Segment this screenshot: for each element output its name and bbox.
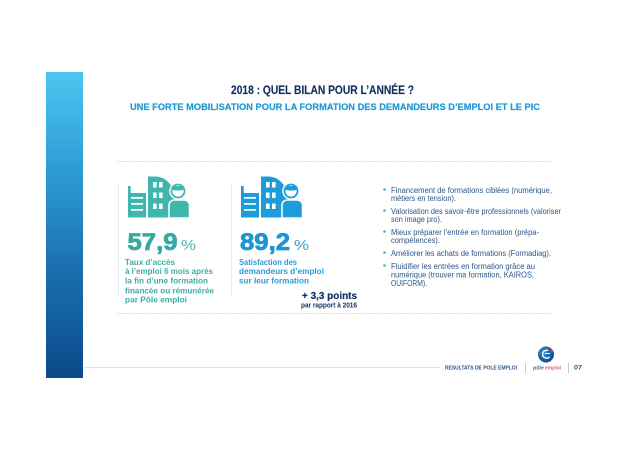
- label taux d'accès: par Pôle emploi: [125, 296, 187, 304]
- value 57,9 %: [128, 229, 196, 256]
- label satisfaction: demandeurs d’emploi: [239, 267, 324, 276]
- page number: 07: [574, 364, 582, 372]
- bullet list: Financement de formations ciblées (numérique,: [391, 186, 552, 195]
- logo: pôle emploi: [533, 346, 561, 372]
- value 89,2 %: 89,2: [240, 229, 290, 256]
- value 57,9 %: %: [181, 237, 196, 254]
- label satisfaction: sur leur formation: [239, 276, 309, 286]
- side gradient bar: [46, 72, 83, 378]
- value 57,9 %: 57,9: [128, 229, 178, 256]
- label satisfaction: [239, 258, 324, 286]
- bullet list: compétences).: [391, 236, 440, 245]
- logo: pôle emploi: pôle: [533, 366, 544, 372]
- icon: building and person teal: [128, 176, 190, 218]
- bullet list: [383, 186, 561, 288]
- value 89,2 %: %: [294, 237, 309, 254]
- bullet list: numérique (trouver ma formation, KAIROS,: [391, 270, 534, 280]
- label taux d'accès: la fin d’une formation: [125, 276, 208, 286]
- value 89,2 %: [240, 229, 309, 256]
- bullet list: son image pro).: [391, 215, 442, 224]
- footer: [445, 346, 582, 373]
- label satisfaction: Satisfaction des: [239, 258, 298, 267]
- label taux d'accès: [125, 258, 215, 304]
- bullet list: Fluidifier les entrées en formation grâce au: [391, 262, 535, 271]
- bullet list: Valorisation des savoir-être professionnels (valoriser: [391, 207, 561, 216]
- bullet list: Mieux préparer l’entrée en formation (prépa-: [391, 228, 539, 237]
- panel: satisfaction: [239, 176, 357, 310]
- callout: plus 3,3 points: + 3,3 points: [302, 290, 357, 302]
- label taux d'accès: financée ou rémunérée: [125, 286, 215, 296]
- title: 2018 : QUEL BILAN POUR L’ANNÉE ?: [231, 84, 414, 97]
- panel: taux d'accès: [125, 176, 215, 304]
- bullet list: métiers en tension).: [391, 194, 456, 203]
- icon: building and person blue: [241, 176, 302, 218]
- callout: plus 3,3 points: [301, 290, 357, 310]
- bullet list: Améliorer les achats de formations (Formadiag).: [391, 249, 551, 258]
- footer label: RESULTATS DE POLE EMPLOI: [445, 366, 517, 372]
- label taux d'accès: Taux d’accès: [125, 258, 176, 267]
- callout: plus 3,3 points: par rapport à 2016: [301, 302, 357, 310]
- label taux d'accès: à l’emploi 6 mois après: [125, 267, 214, 276]
- logo: pôle emploi: emploi: [545, 366, 561, 372]
- bullet list: OUIFORM).: [391, 279, 427, 288]
- subtitle: UNE FORTE MOBILISATION POUR LA FORMATION DES DEMANDEURS D’EMPLOI ET LE PIC: [130, 102, 540, 113]
